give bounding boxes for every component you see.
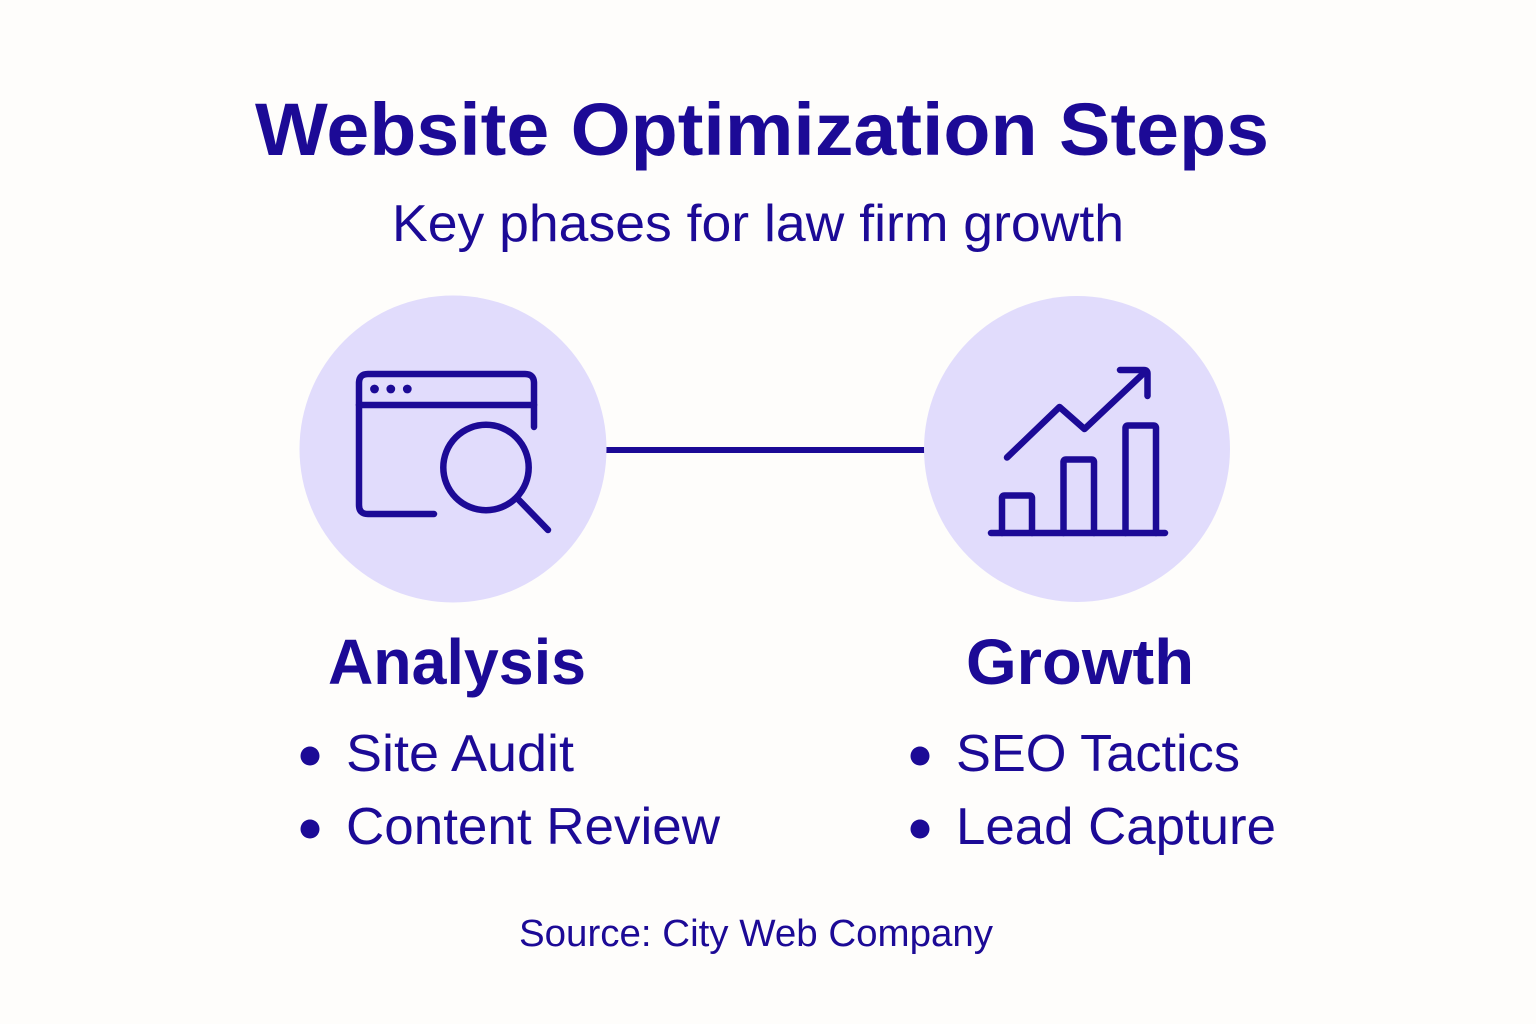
heading: analysis: Analysis [328, 626, 586, 698]
panel: growth icon circle [924, 296, 1230, 602]
source note: Source: City Web Company [519, 913, 993, 955]
title: Website Optimization Steps [255, 88, 1269, 171]
panel: analysis icon circle [300, 296, 606, 602]
list: analysis items: Content Review [346, 798, 720, 856]
list: growth items: Lead Capture [956, 798, 1276, 856]
list: analysis items: Site Audit [346, 725, 575, 783]
list: analysis items [300, 725, 720, 856]
connector line [606, 447, 925, 453]
icon: browser with magnifier [359, 374, 548, 530]
subtitle: Key phases for law firm growth [392, 195, 1124, 253]
heading: growth: Growth [966, 626, 1194, 698]
list: growth items [910, 725, 1276, 856]
icon: bar chart with rising arrow [991, 370, 1165, 533]
list: growth items: SEO Tactics [956, 725, 1240, 783]
